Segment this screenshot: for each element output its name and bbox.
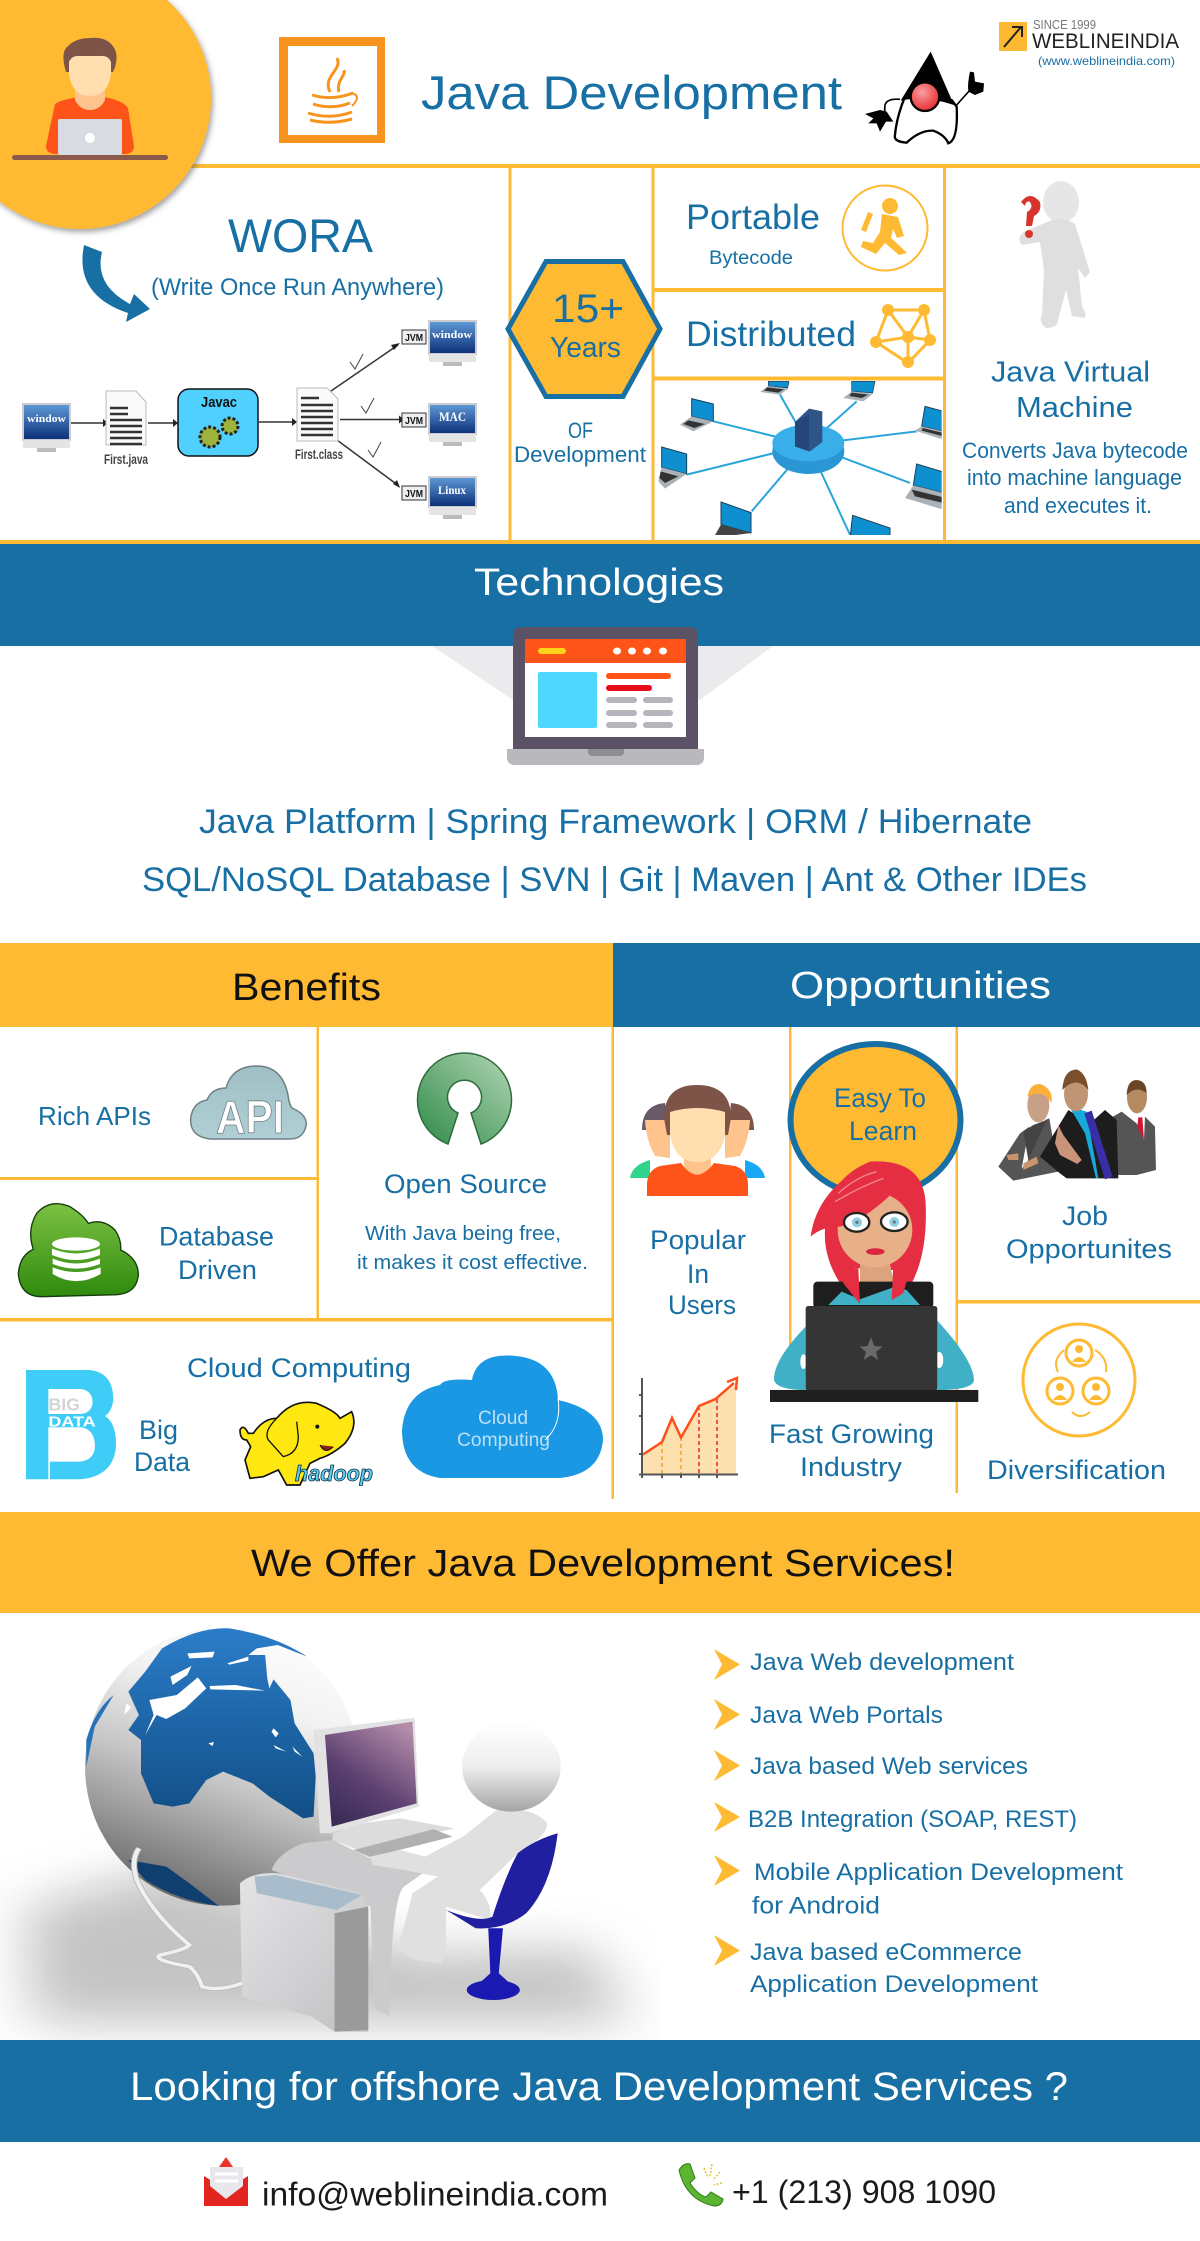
band: technologies: Technologies bbox=[474, 562, 724, 604]
panel: distributed: Distributed bbox=[686, 315, 856, 354]
flow diagram: compile once, run on any JVM: Linux bbox=[438, 483, 466, 497]
band: opportunities bbox=[613, 943, 1200, 1027]
panel: popular in users: Users bbox=[668, 1290, 736, 1320]
illustration: globe and 3d figure at computer bbox=[25, 1628, 631, 2032]
list: java services: Java Web Portals bbox=[750, 1702, 943, 1729]
chart: growth line bbox=[639, 1378, 738, 1478]
panel: rich APIs: Rich APIs bbox=[38, 1101, 151, 1131]
icon: duke mascot bbox=[865, 52, 984, 143]
icon: business people bbox=[998, 1069, 1156, 1181]
icon: java cup tile bbox=[279, 37, 385, 143]
panel: open source bbox=[357, 1053, 588, 1274]
panel: popular in users: In bbox=[687, 1259, 709, 1289]
title: Java Development bbox=[421, 66, 842, 119]
panel: fast growing industry: Fast Growing bbox=[769, 1419, 934, 1449]
panel: cloud computing bbox=[187, 1353, 603, 1486]
list: java services: Application Development bbox=[750, 1971, 1038, 1998]
icon: big data letter B: DATA bbox=[48, 1415, 96, 1431]
panel: portable bbox=[686, 186, 928, 270]
icon: green database cloud bbox=[18, 1204, 138, 1297]
flow diagram: compile once, run on any JVM: MAC bbox=[439, 409, 466, 424]
list: java services bbox=[714, 1649, 1123, 1998]
contact: email: info@weblineindia.com bbox=[262, 2176, 608, 2212]
icon: developer at laptop bbox=[12, 38, 168, 160]
panel: distributed bbox=[686, 304, 936, 368]
panel: cloud computing: Cloud Computing bbox=[187, 1353, 411, 1383]
panel: job opportunities: Job bbox=[1062, 1201, 1108, 1231]
panel: java virtual machine: Machine bbox=[1016, 392, 1133, 424]
panel: job opportunities: Opportunites bbox=[1006, 1234, 1172, 1264]
flow diagram: compile once, run on any JVM: Javac bbox=[201, 394, 237, 411]
flow diagram: compile once, run on any JVM: JVM bbox=[405, 489, 423, 500]
icon: open source keyhole bbox=[418, 1053, 512, 1144]
icon: user group bbox=[630, 1085, 765, 1196]
panel: WORA bbox=[23, 209, 476, 519]
icon: blue cloud: Computing bbox=[457, 1430, 550, 1451]
panel: open source: With Java being free, bbox=[365, 1223, 561, 1245]
panel: big data: Big bbox=[139, 1415, 178, 1445]
flow diagram: compile once, run on any JVM: JVM bbox=[405, 333, 423, 344]
flow diagram: compile once, run on any JVM: JVM bbox=[405, 416, 423, 427]
icon: runner bbox=[842, 186, 928, 270]
flow diagram: compile once, run on any JVM: window bbox=[432, 329, 472, 341]
band: we offer services: We Offer Java Development Services! bbox=[251, 1543, 955, 1585]
list: java services: for Android bbox=[752, 1892, 880, 1920]
band: we offer services bbox=[0, 1512, 1200, 1613]
list: java services: Java based Web services bbox=[750, 1753, 1028, 1780]
contact: phone bbox=[679, 2164, 996, 2210]
text: of development bbox=[514, 418, 646, 467]
company logo: (www.weblineindia.com) bbox=[1038, 54, 1175, 68]
panel: diversification bbox=[987, 1324, 1166, 1485]
band: call to action: Looking for offshore Java Development Services ? bbox=[130, 2065, 1068, 2109]
icon: laptop with web page bbox=[432, 627, 773, 765]
panel: java virtual machine: and executes it. bbox=[1004, 493, 1152, 518]
panel: database driven: Driven bbox=[178, 1255, 257, 1285]
icon: big data letter B: BIG bbox=[48, 1395, 80, 1415]
icon: blue cloud: Cloud bbox=[478, 1408, 528, 1429]
list: java services: B2B Integration (SOAP, REST) bbox=[748, 1806, 1077, 1833]
contact: phone: +1 (213) 908 1090 bbox=[732, 2174, 996, 2210]
panel: fast growing industry: Industry bbox=[800, 1452, 903, 1482]
heading: WORA: WORA bbox=[228, 209, 374, 262]
contact: email bbox=[204, 2157, 608, 2212]
list: java services: Java Web development bbox=[750, 1649, 1014, 1676]
circle: easy to learn bbox=[790, 1044, 960, 1196]
panel: easy to learn with girl bbox=[770, 1044, 978, 1402]
icon: API cloud: API bbox=[216, 1091, 284, 1143]
icon: 3d figure with question mark bbox=[1019, 181, 1090, 328]
icon: hadoop elephant: hadoop bbox=[295, 1461, 373, 1486]
technologies list bbox=[142, 803, 1087, 899]
icon: API cloud bbox=[191, 1066, 306, 1143]
section grid lines bbox=[0, 1027, 1200, 1499]
panel: diversification: Diversification bbox=[987, 1455, 1166, 1485]
panel: portable: Bytecode bbox=[709, 248, 793, 269]
technologies list: Java Platform | Spring Framework | ORM / Hibernate bbox=[199, 803, 1032, 841]
badge: 15+ years: Years bbox=[550, 332, 621, 364]
text: of development: Development bbox=[514, 442, 646, 467]
company logo: WEBLINEINDIA bbox=[1032, 30, 1179, 53]
image: client server network bbox=[658, 381, 943, 538]
badge: 15+ years bbox=[508, 262, 660, 396]
icon: red haired girl with laptop bbox=[770, 1161, 978, 1402]
panel: popular in users: Popular bbox=[650, 1225, 746, 1255]
technologies list: SQL/NoSQL Database | SVN | Git | Maven | Ant & Other IDEs bbox=[142, 861, 1087, 899]
band: opportunities: Opportunities bbox=[790, 965, 1051, 1007]
panel: rich APIs bbox=[38, 1066, 306, 1143]
flow diagram: compile once, run on any JVM: First.java bbox=[104, 451, 148, 467]
badge: 15+ years: 15+ bbox=[552, 287, 624, 331]
icon: phone handset bbox=[679, 2164, 723, 2206]
top header rule and grid lines bbox=[0, 164, 1200, 544]
panel: java virtual machine: into machine language bbox=[967, 465, 1182, 490]
icon: chevron bullets bbox=[714, 1649, 740, 1966]
panel: fast growing industry bbox=[639, 1378, 934, 1482]
panel: job opportunities bbox=[998, 1069, 1172, 1264]
icon: network nodes bbox=[870, 304, 936, 368]
band: technologies bbox=[0, 544, 1200, 646]
panel: open source: Open Source bbox=[384, 1169, 547, 1199]
icon: people cycle bbox=[1023, 1324, 1135, 1436]
panel: popular in users bbox=[630, 1085, 765, 1320]
list: java services: Java based eCommerce bbox=[750, 1939, 1022, 1966]
icon: hadoop elephant bbox=[240, 1402, 373, 1486]
flow diagram: compile once, run on any JVM bbox=[23, 321, 476, 519]
panel: database driven bbox=[18, 1204, 274, 1297]
company logo: SINCE 1999 bbox=[1033, 17, 1096, 32]
circle: easy to learn: Easy To bbox=[834, 1083, 926, 1113]
flow diagram: compile once, run on any JVM: window bbox=[27, 413, 66, 425]
list: java services: Mobile Application Development bbox=[754, 1859, 1123, 1886]
band: benefits bbox=[0, 943, 613, 1027]
arrow: curved down bbox=[82, 245, 150, 322]
icon: blue cloud bbox=[402, 1356, 603, 1478]
flow diagram: compile once, run on any JVM: First.class bbox=[295, 446, 343, 462]
panel: big data bbox=[26, 1370, 191, 1479]
panel: java virtual machine: Converts Java bytecode bbox=[962, 438, 1188, 463]
panel: java virtual machine bbox=[962, 181, 1188, 518]
panel: portable: Portable bbox=[686, 198, 820, 237]
band: call to action bbox=[0, 2040, 1200, 2142]
icon: envelope bbox=[204, 2157, 248, 2206]
developer badge circle bbox=[0, 0, 211, 229]
company logo bbox=[999, 17, 1179, 68]
subheading: (Write Once Run Anywhere) bbox=[151, 274, 444, 301]
panel: java virtual machine: Java Virtual bbox=[991, 356, 1150, 388]
band: benefits: Benefits bbox=[232, 967, 381, 1009]
panel: big data: Data bbox=[134, 1447, 191, 1477]
panel: database driven: Database bbox=[159, 1222, 274, 1252]
icon: big data letter B bbox=[26, 1370, 116, 1479]
circle: easy to learn: Learn bbox=[849, 1116, 917, 1146]
text: of development: OF bbox=[568, 418, 593, 443]
panel: open source: it makes it cost effective. bbox=[357, 1252, 588, 1274]
